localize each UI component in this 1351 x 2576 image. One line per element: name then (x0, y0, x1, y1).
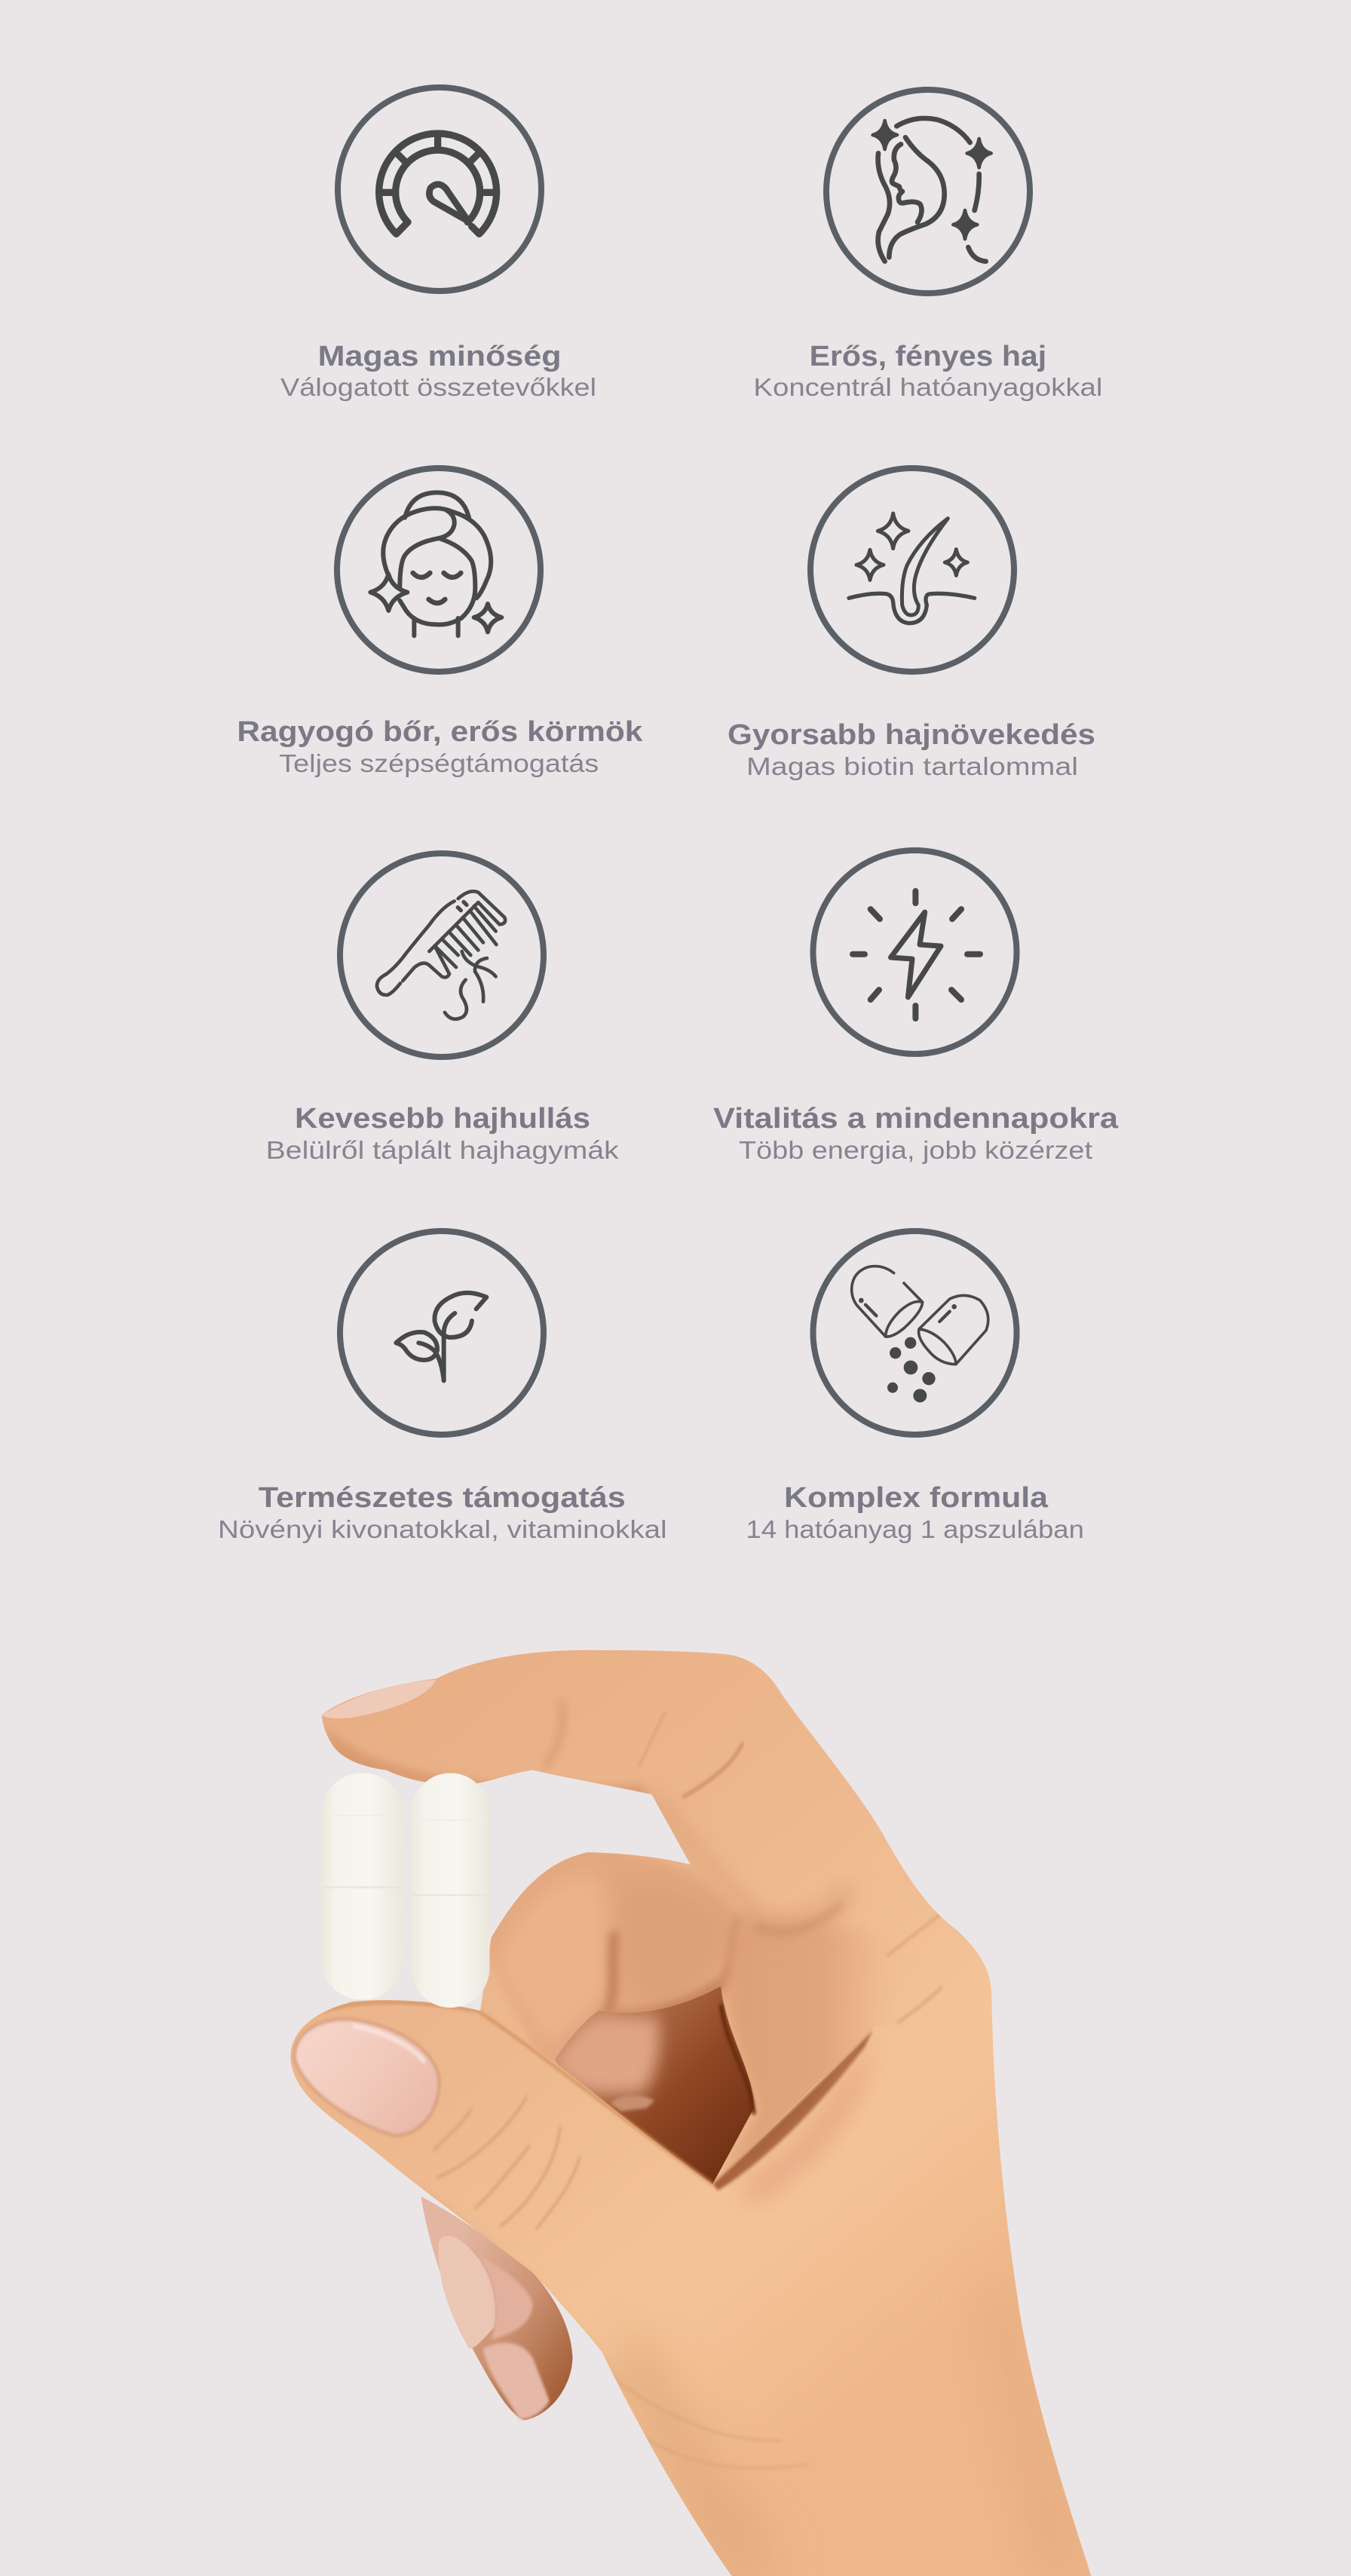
title: Gyorsabb hajnövekedés (728, 719, 1095, 751)
icon: hair follicle (810, 468, 1014, 672)
subtitle: Növényi kivonatokkal, vitaminokkal (218, 1515, 667, 1543)
title: Kevesebb hajhullás (295, 1103, 590, 1135)
icon: gauge (338, 87, 541, 291)
subtitle: Több energia, jobb közérzet (739, 1136, 1092, 1164)
palm behind the crease (719, 1916, 870, 2174)
benefit: Magas minőség (280, 87, 596, 401)
title: Természetes támogatás (259, 1482, 626, 1514)
subtitle: 14 hatóanyag 1 apszulában (746, 1515, 1084, 1543)
title: Ragyogó bőr, erős körmök (237, 716, 643, 748)
little finger with nails (421, 2197, 573, 2420)
folds on back of hand and index finger (323, 1700, 942, 2023)
dark cavity (555, 1986, 754, 2184)
capsule right (411, 1773, 489, 2008)
icon: open capsules (813, 1231, 1016, 1435)
icon: comb with hair (340, 853, 544, 1057)
title: Komplex formula (784, 1482, 1049, 1514)
title: Vitalitás a mindennapokra (713, 1103, 1119, 1135)
benefit: Ragyogó bőr, erős körmök (237, 468, 643, 777)
benefit: Kevesebb hajhullás (266, 853, 619, 1164)
icon: face with towel (337, 468, 541, 672)
infographic: benefits and hand with capsules (220, 84, 1119, 2576)
icon: woman profile with hair (826, 90, 1030, 293)
benefit: Gyorsabb hajnövekedés (728, 468, 1095, 780)
benefit: Komplex formula (746, 1231, 1084, 1543)
index finger nail (322, 1680, 436, 1718)
icon: sprout (340, 1231, 544, 1435)
capsule left (322, 1773, 403, 2000)
subtitle: Válogatott összetevőkkel (280, 373, 596, 401)
benefit: Erős, fényes haj (753, 90, 1102, 401)
title: Erős, fényes haj (810, 341, 1046, 372)
subtitle: Belülről táplált hajhagymák (266, 1136, 619, 1164)
thumb and lower hand, blended into the base skin (278, 2000, 1091, 2576)
subtitle: Koncentrál hatóanyagokkal (753, 373, 1102, 401)
icon: lightning bolt (813, 850, 1016, 1054)
title: Magas minőség (318, 341, 562, 372)
hand silhouette with shading (290, 1649, 1092, 2576)
subtitle: Teljes szépségtámogatás (279, 749, 599, 777)
benefit: Természetes támogatás (218, 1231, 667, 1543)
subtitle: Magas biotin tartalommal (746, 752, 1078, 780)
illustration: hand holding two capsules (290, 1649, 1092, 2576)
thumb nail (295, 2020, 439, 2136)
curled fingers (490, 1852, 741, 2060)
benefit: Vitalitás a mindennapokra (713, 850, 1119, 1164)
